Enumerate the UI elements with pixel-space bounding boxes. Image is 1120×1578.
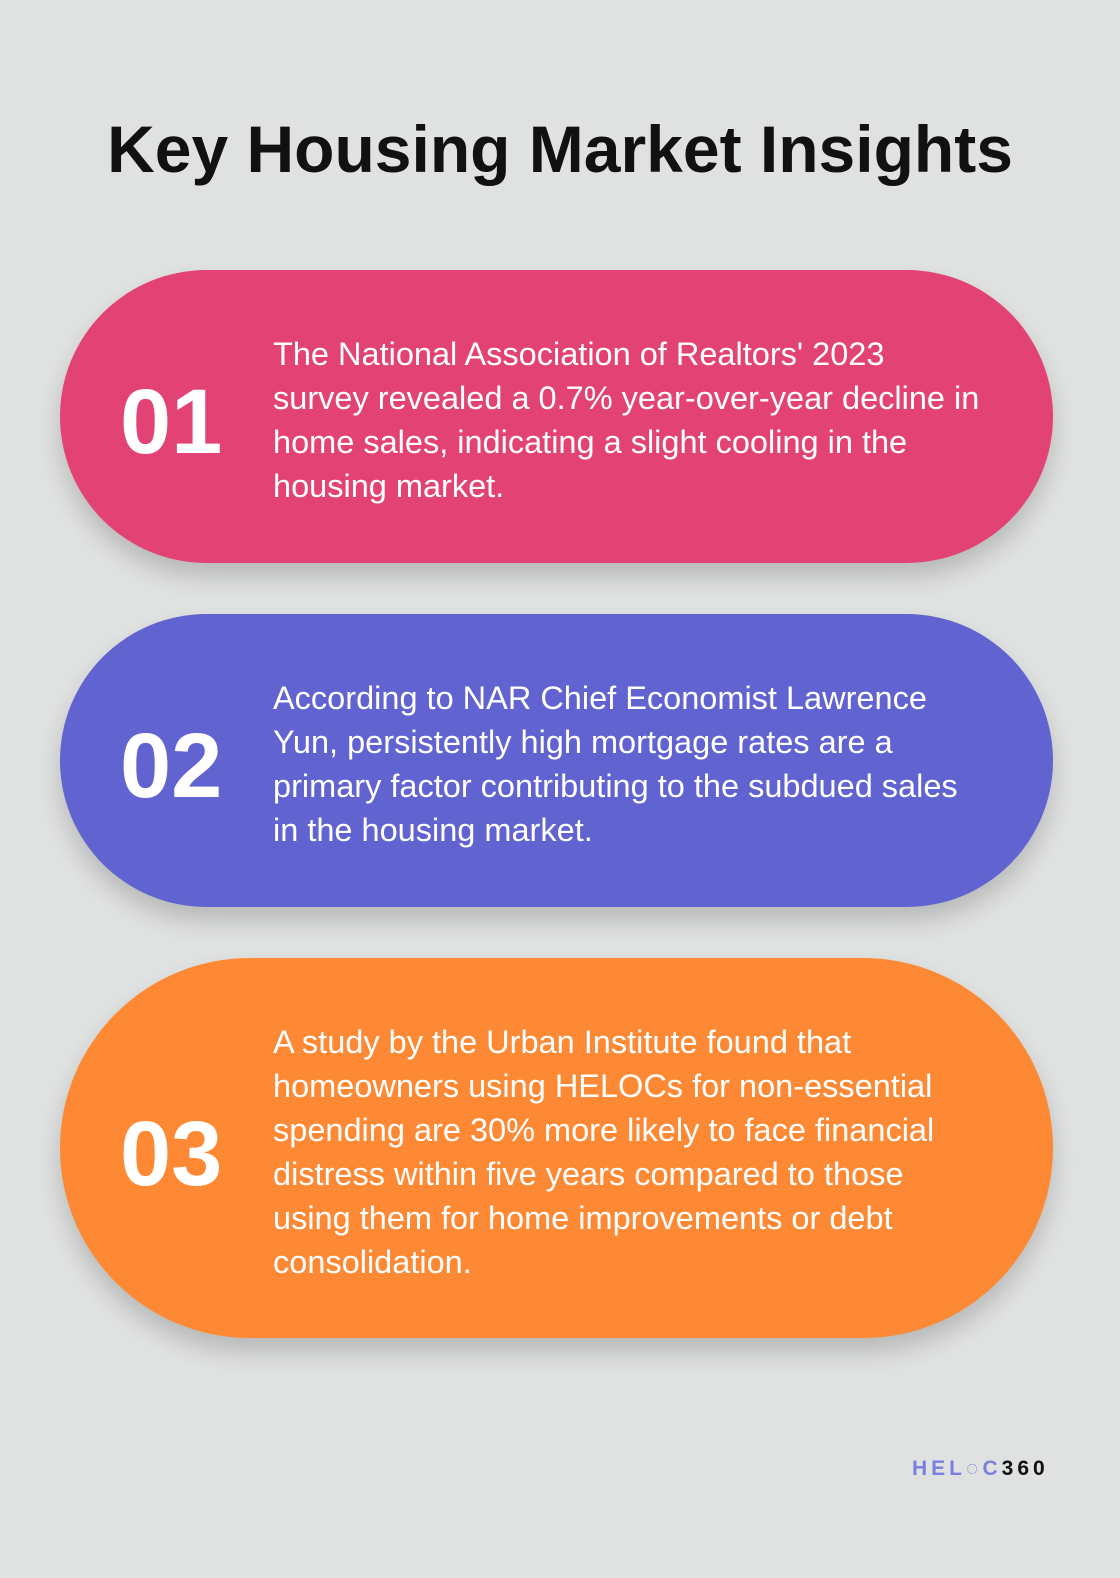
- panel: insight 03: [60, 958, 1053, 1338]
- number 01: 01: [120, 371, 222, 473]
- panel: insight 02: [60, 614, 1053, 907]
- text 02: According to NAR Chief Economist Lawrence: [273, 680, 927, 716]
- text 03: [273, 1024, 934, 1280]
- number 03: 03: [120, 1103, 222, 1205]
- text 03: A study by the Urban Institute found that: [273, 1024, 851, 1060]
- logo: HEL◌C360: [912, 1457, 1049, 1480]
- number 02: 02: [120, 715, 222, 817]
- text 03: spending are 30% more likely to face financial: [273, 1112, 934, 1148]
- text 02: [273, 680, 958, 848]
- text 03: distress within five years compared to those: [273, 1156, 903, 1192]
- text 03: using them for home improvements or debt: [273, 1200, 893, 1236]
- text 02: primary factor contributing to the subdued sales: [273, 768, 958, 804]
- panel: insight 01: [60, 270, 1053, 563]
- text 03: homeowners using HELOCs for non-essential: [273, 1068, 932, 1104]
- title: Key Housing Market Insights: [107, 112, 1013, 186]
- text 02: Yun, persistently high mortgage rates are a: [273, 724, 893, 760]
- text 01: home sales, indicating a slight cooling in the: [273, 424, 907, 460]
- text 01: housing market.: [273, 468, 504, 504]
- text 01: [273, 336, 979, 504]
- text 03: consolidation.: [273, 1244, 472, 1280]
- text 01: survey revealed a 0.7% year-over-year decline in: [273, 380, 979, 416]
- text 02: in the housing market.: [273, 812, 593, 848]
- text 01: The National Association of Realtors' 2023: [273, 336, 884, 372]
